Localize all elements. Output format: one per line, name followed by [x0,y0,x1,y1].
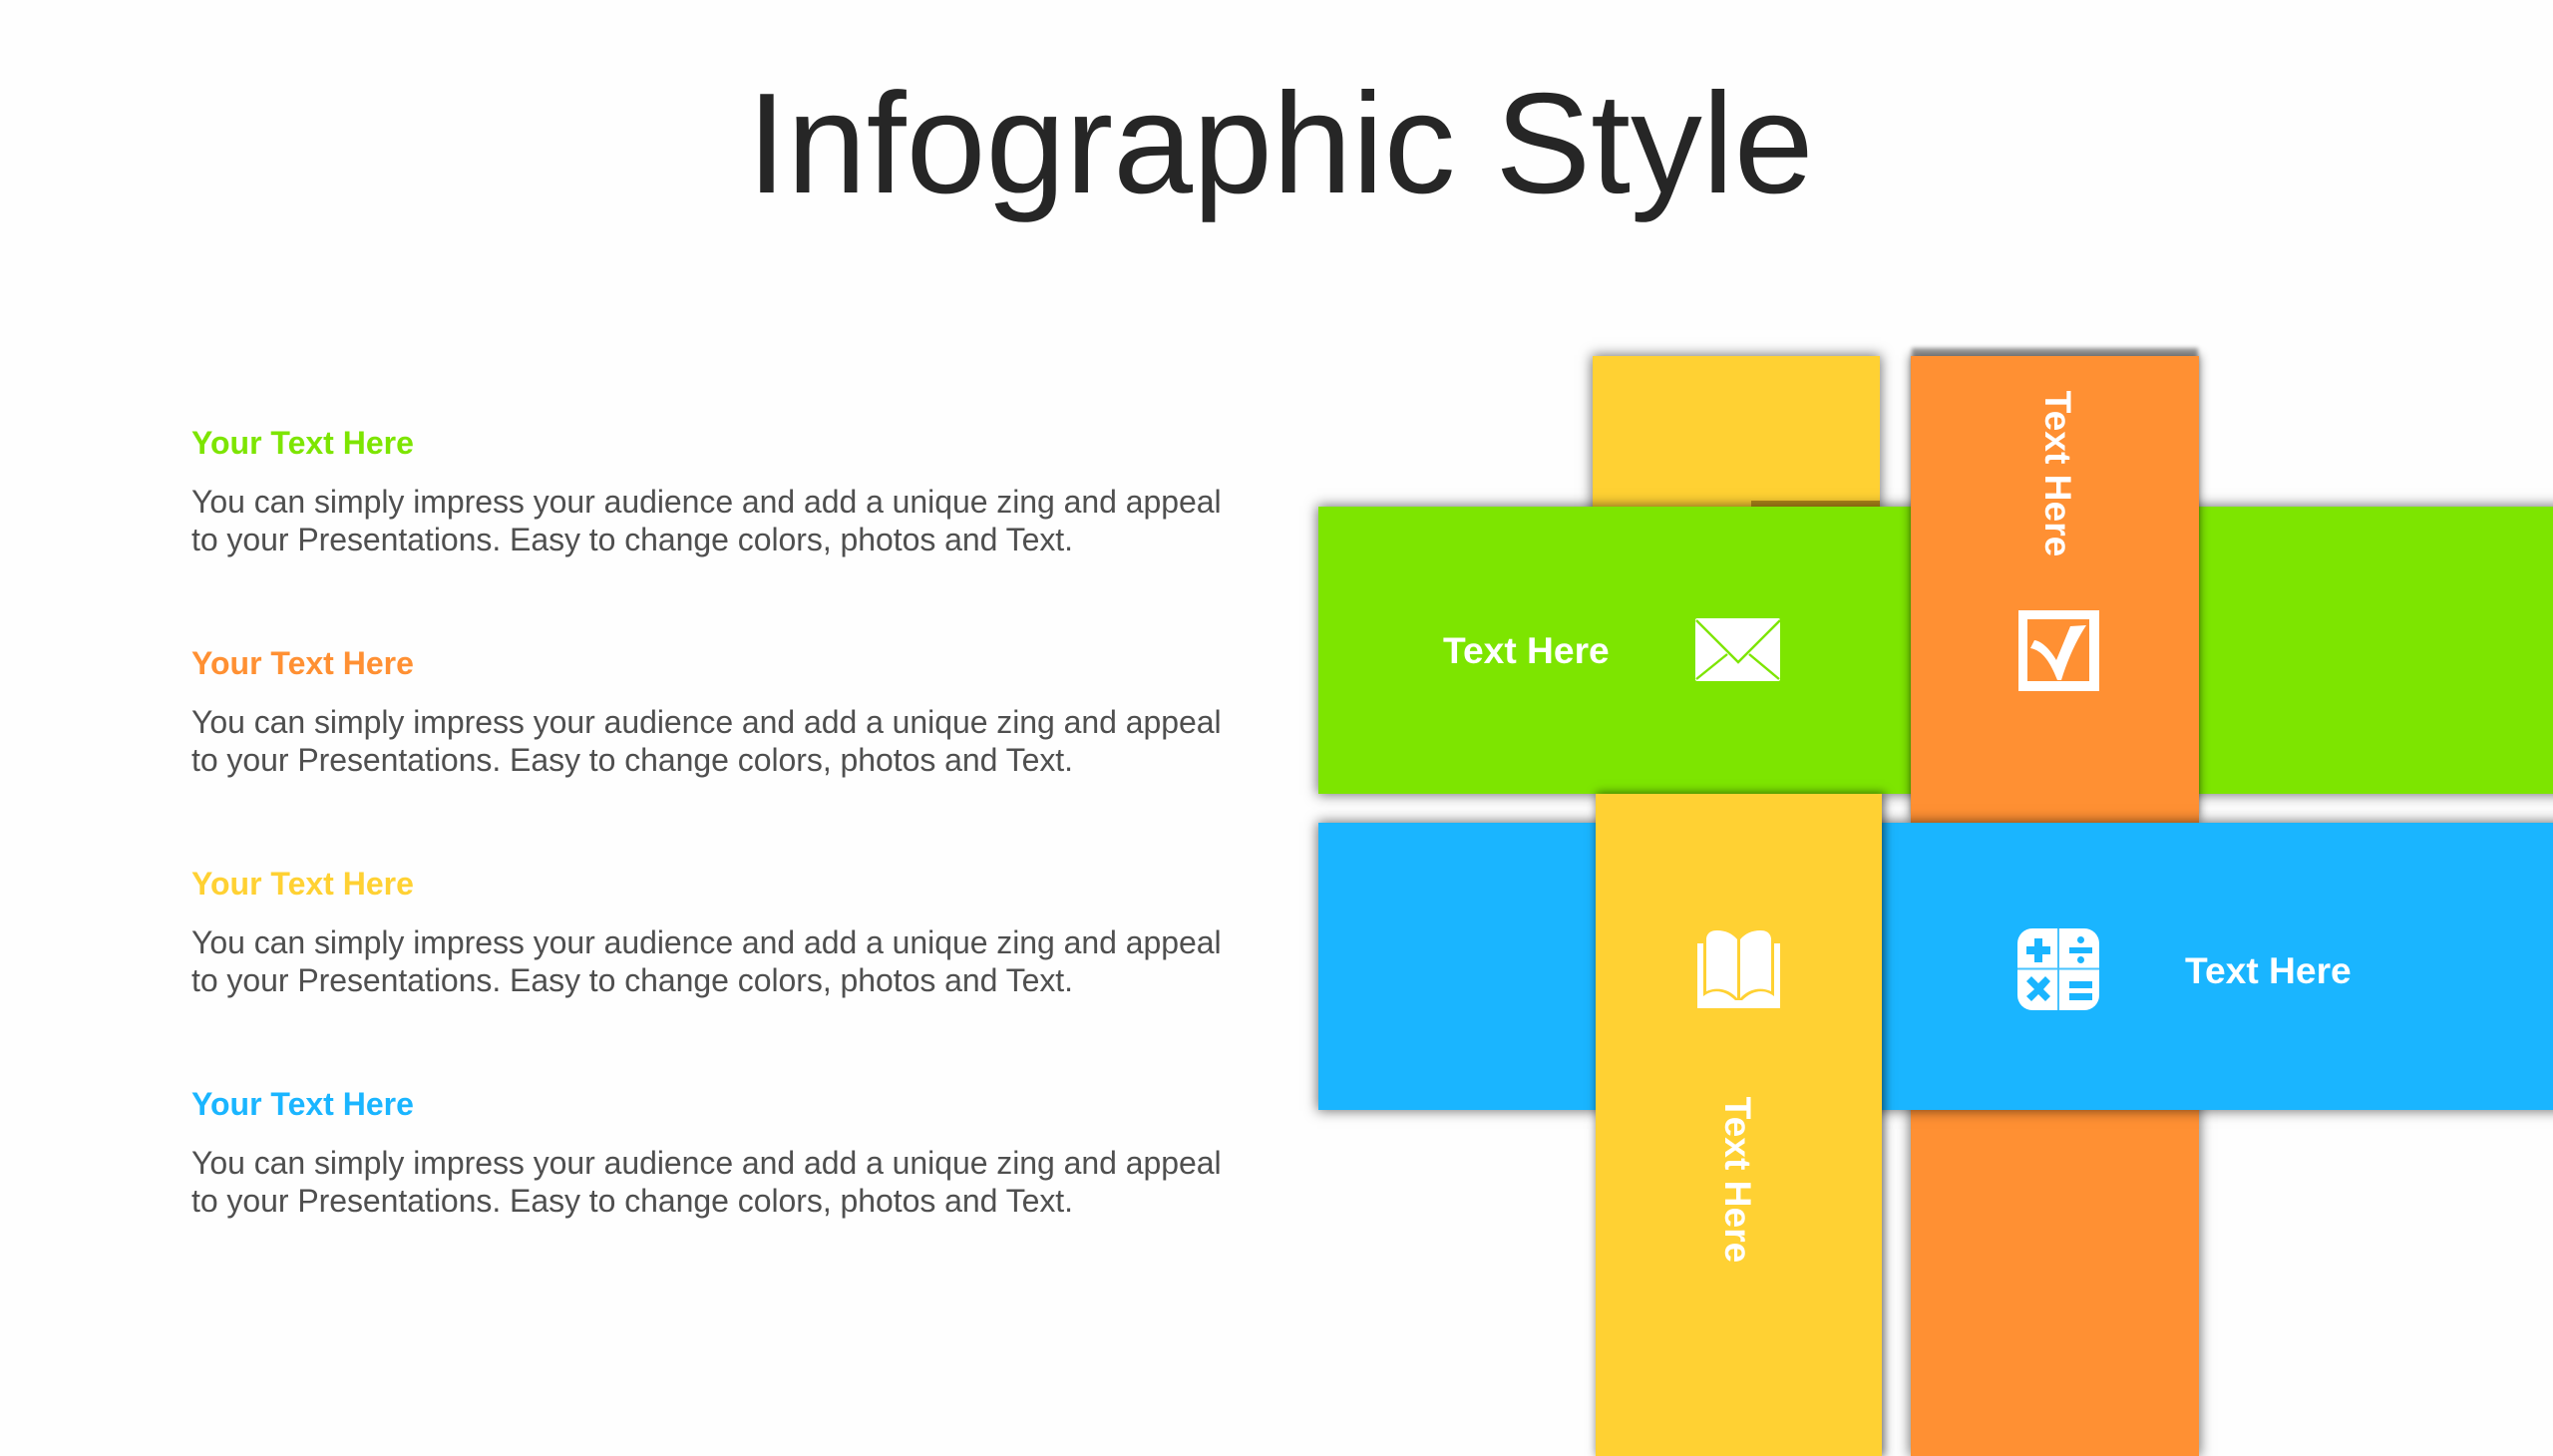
ribbon: blue [1318,823,2553,1110]
heading: item 4: Your Text Here [191,1086,414,1122]
heading: item 2: Your Text Here [191,645,414,681]
label: orange ribbon: Text Here [2037,391,2079,556]
text block: item 1 [191,425,1222,557]
ribbon: yellow upper [1593,356,1880,516]
body: item 4 [191,1145,1222,1219]
heading: item 3: Your Text Here [191,866,414,902]
icon: envelope [1695,618,1780,681]
label: green ribbon: Text Here [1443,629,1610,671]
title: Infographic Style [747,64,1814,223]
label: yellow ribbon: Text Here [1717,1097,1759,1263]
body: item 2: You can simply impress your audience and add a unique zing and appeal [191,704,1222,740]
heading: item 1: Your Text Here [191,425,414,461]
body: item 3: You can simply impress your audience and add a unique zing and appeal [191,924,1222,960]
body: item 1: to your Presentations. Easy to change colors, photos and Text. [191,522,1073,557]
ribbon: green [1318,507,2553,794]
text block: item 3 [191,866,1222,998]
label: blue ribbon: Text Here [2185,949,2352,991]
body: item 4: to your Presentations. Easy to change colors, photos and Text. [191,1183,1073,1219]
ribbon: yellow lower [1596,794,1882,1456]
body: item 1 [191,484,1222,557]
body: item 2: to your Presentations. Easy to change colors, photos and Text. [191,742,1073,778]
body: item 3: to your Presentations. Easy to change colors, photos and Text. [191,962,1073,998]
text block: item 2 [191,645,1222,778]
body: item 1: You can simply impress your audience and add a unique zing and appeal [191,484,1222,520]
icon: calculator [2017,928,2099,1010]
ribbon: orange lower [1911,1097,2199,1456]
text block: item 4 [191,1086,1222,1219]
icon: checkbox [2018,610,2099,691]
shadow patch on yellow ribbon [1751,501,1880,507]
body: item 2 [191,704,1222,778]
icon: open book [1697,930,1780,1008]
body: item 4: You can simply impress your audience and add a unique zing and appeal [191,1145,1222,1181]
ribbon: orange upper [1911,356,2199,824]
body: item 3 [191,924,1222,998]
